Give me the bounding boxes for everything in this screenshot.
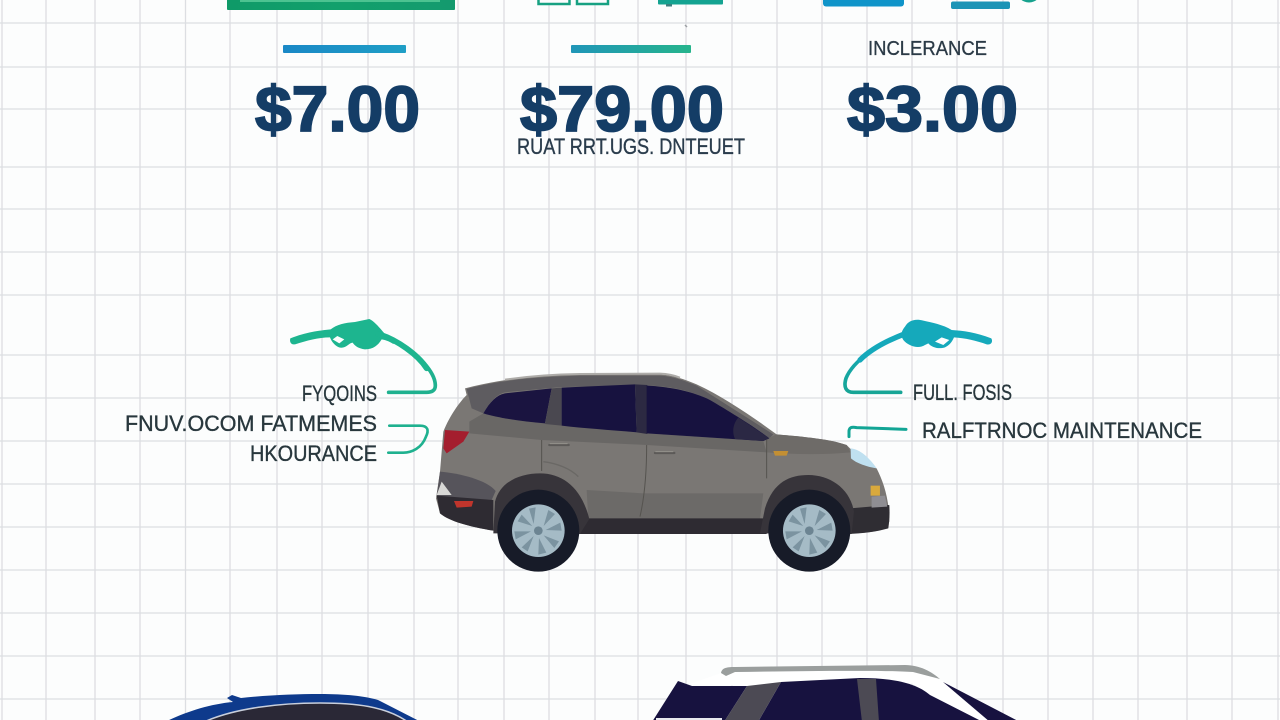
shoulder band [469,413,767,452]
rear side window [483,388,552,423]
tail lamp [443,430,469,453]
white roof [690,670,1002,720]
icon: green fuel nozzle with hose [290,319,435,392]
blue car cropped at bottom [165,694,425,720]
fender marker [773,451,788,456]
left callouts [125,319,435,466]
price: column 3: $3.00 [847,73,1018,145]
door lines and handles [542,440,767,517]
rear glass [652,681,747,720]
middle window [562,384,637,432]
wheel arches [493,473,589,534]
column 3 heading: INCLERANCE [868,38,987,60]
white and navy car cropped at bottom [652,665,1020,720]
grey SUV illustration [436,374,890,572]
front wheel [768,490,850,572]
right callouts [845,320,1202,443]
icon: cropped circle [1016,0,1042,2]
label: left 2: FNUV.OCOM FATMEMES [125,411,377,436]
rear bumper [437,472,496,500]
price: column 1: $7.00 [255,73,420,145]
icon: small blue bar [951,2,1010,9]
rear wheel [497,490,579,572]
icon: blue bar [823,0,904,6]
front bumper [847,505,890,534]
roof rack [721,665,940,679]
lower trim [656,718,722,720]
right dark strip [943,682,1020,720]
cropped top icons row [227,0,1042,27]
side window [758,678,983,720]
price: column 2: $79.00 [520,73,724,145]
front window [647,386,769,441]
hood shade [767,434,851,454]
rear pillar [545,388,562,426]
lower door shade [587,490,763,519]
roof rail [467,376,773,438]
connector: green bracket [388,426,428,453]
label: left 3: HKOURANCE [250,441,377,466]
column 1 heading bar [283,45,406,53]
car body [436,374,889,534]
label: right 2: RALFTRNOC MAINTENANCE [922,418,1202,443]
icon: outlined squares [538,0,608,4]
door pillar [635,384,647,434]
column 2 heading bar [571,45,691,53]
column 2 caption: RUAT RRT.UGS. DNTEUET [517,134,745,159]
icon: teal bar [658,0,723,27]
rocker [580,518,767,534]
connector: small teal line [849,427,906,437]
headlight [851,448,877,468]
icon: green bar [227,0,455,10]
window pillars [724,679,879,720]
label: right 1: FULL. FOSIS [913,380,1012,405]
label: left 1: FYQOINS [302,381,377,406]
icon: teal fuel nozzle with hose [845,320,992,392]
